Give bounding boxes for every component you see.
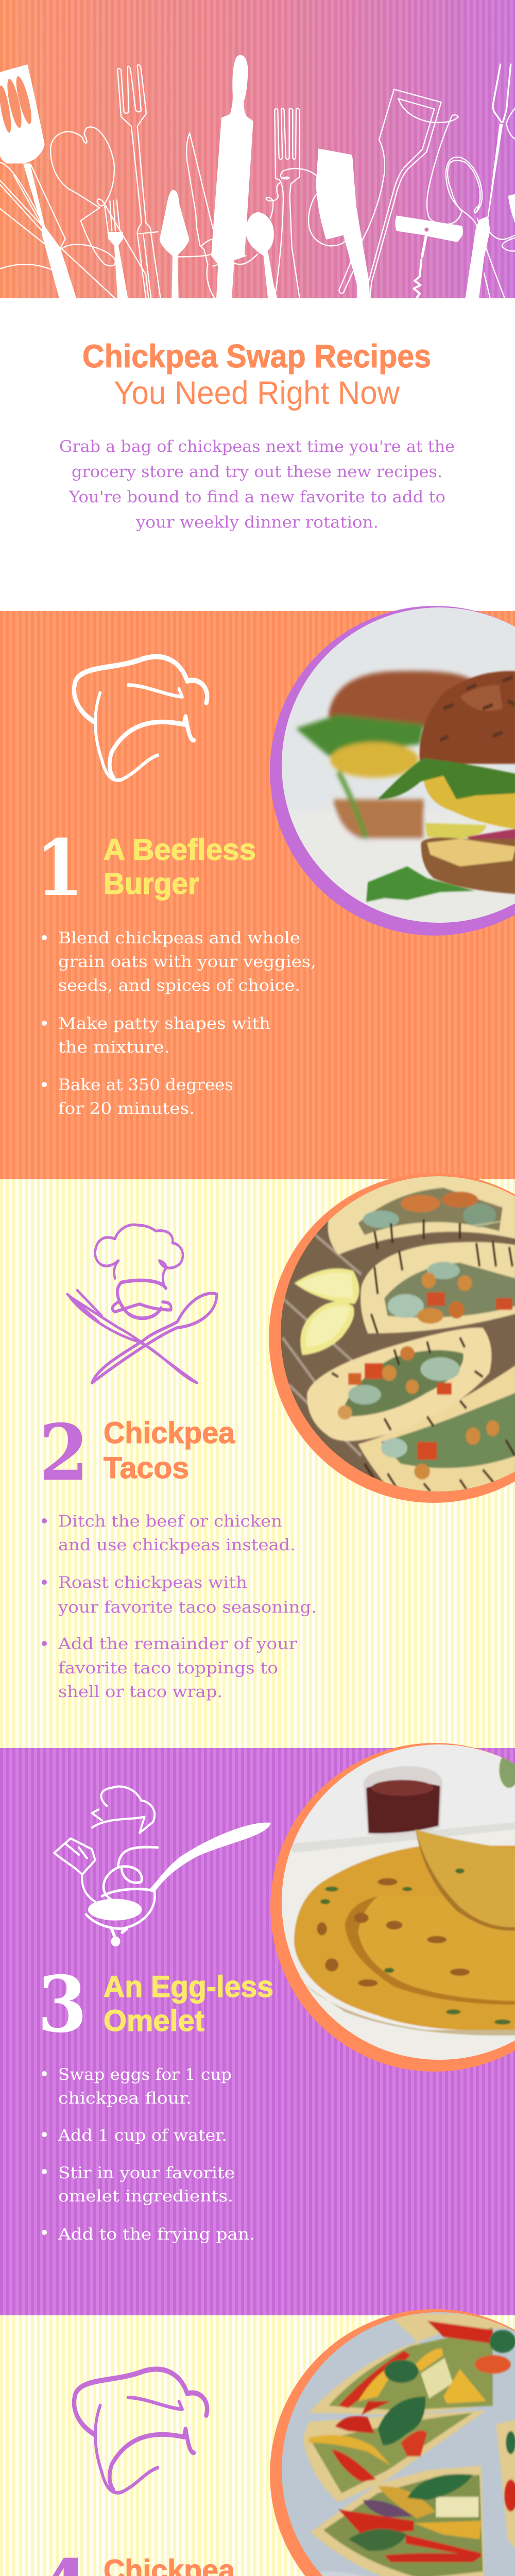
heading: an egg-less omelet: An Egg-less — [104, 1970, 273, 2004]
bullet list: for 20 minutes. — [58, 1099, 195, 1118]
utensils left half — [0, 55, 258, 298]
heading: an egg-less omelet: Omelet — [104, 2004, 204, 2038]
bullet list: chickpea flour. — [58, 2089, 192, 2108]
photo: burgers in circle — [270, 603, 515, 936]
number 2: 2 — [39, 1408, 89, 1498]
bullet list: Ditch the beef or chicken — [58, 1512, 282, 1531]
bullet list: Add 1 cup of water. — [58, 2126, 227, 2145]
bullet list — [42, 1512, 317, 1701]
icon: chef with crossed cutlery — [67, 1225, 217, 1383]
heading: an egg-less omelet — [104, 1970, 273, 2038]
title: You Need Right Now — [114, 375, 400, 411]
bullet list: Add the remainder of your — [58, 1635, 297, 1653]
bullet list: and use chickpeas instead. — [58, 1536, 296, 1554]
heading: a beefless burger: Burger — [104, 867, 199, 901]
bullet list — [42, 2065, 255, 2244]
photo: chickpea omelets in circle — [270, 1741, 515, 2072]
heading: a beefless burger — [104, 833, 256, 901]
icon: chef hand with ladle — [54, 1787, 271, 1946]
bullet list: seeds, and spices of choice. — [58, 976, 300, 995]
intro paragraph: You're bound to find a new favorite to add to — [68, 488, 445, 506]
bullet list: Add to the frying pan. — [58, 2225, 255, 2244]
photo: vegetable pizza in circle — [263, 2308, 515, 2576]
heading: a beefless burger: A Beefless — [104, 833, 256, 867]
panel: recipe 3 egg-less omelet — [0, 1741, 515, 2315]
heading: chickpea tacos: Tacos — [104, 1451, 189, 1485]
bullet list: Bake at 350 degrees — [58, 1076, 233, 1094]
panel: recipe 1 beefless burger — [0, 603, 515, 1179]
bullet list: your favorite taco seasoning. — [58, 1598, 317, 1617]
heading: chickpea tacos — [104, 1416, 235, 1485]
bullet list: Roast chickpeas with — [58, 1573, 247, 1592]
bullet list: favorite taco toppings to — [58, 1659, 278, 1677]
bullet list: the mixture. — [58, 1038, 170, 1057]
intro paragraph: grocery store and try out these new recipes. — [72, 463, 442, 481]
photo: tacos in circle — [269, 1172, 515, 1503]
bullet list: shell or taco wrap. — [58, 1683, 222, 1701]
panel: recipe 4 chickpea pizza crust — [0, 2308, 515, 2576]
panel: recipe 2 chickpea tacos — [0, 1172, 515, 1748]
intro paragraph — [59, 437, 455, 532]
bullet list: Swap eggs for 1 cup — [58, 2065, 232, 2084]
title: Chickpea Swap Recipes — [82, 338, 431, 375]
icon: chef hat — [74, 657, 207, 780]
bullet list: Stir in your favorite — [58, 2164, 235, 2182]
intro paragraph: your weekly dinner rotation. — [135, 513, 379, 532]
utensils right half — [246, 64, 515, 298]
bullet list: omelet ingredients. — [58, 2187, 233, 2206]
icon: chef hat — [74, 2369, 207, 2493]
heading: chickpea tacos: Chickpea — [104, 1416, 235, 1450]
bullet list — [42, 929, 316, 1118]
bullet list: Blend chickpeas and whole — [58, 929, 300, 947]
title — [82, 338, 431, 411]
intro paragraph: Grab a bag of chickpeas next time you're at the — [59, 437, 455, 456]
number 3: 3 — [38, 1959, 87, 2050]
bullet list: Make patty shapes with — [58, 1014, 270, 1033]
hero banner with kitchen utensils — [0, 0, 515, 298]
number 1: 1 — [36, 823, 83, 913]
bullet list: grain oats with your veggies, — [58, 953, 316, 971]
